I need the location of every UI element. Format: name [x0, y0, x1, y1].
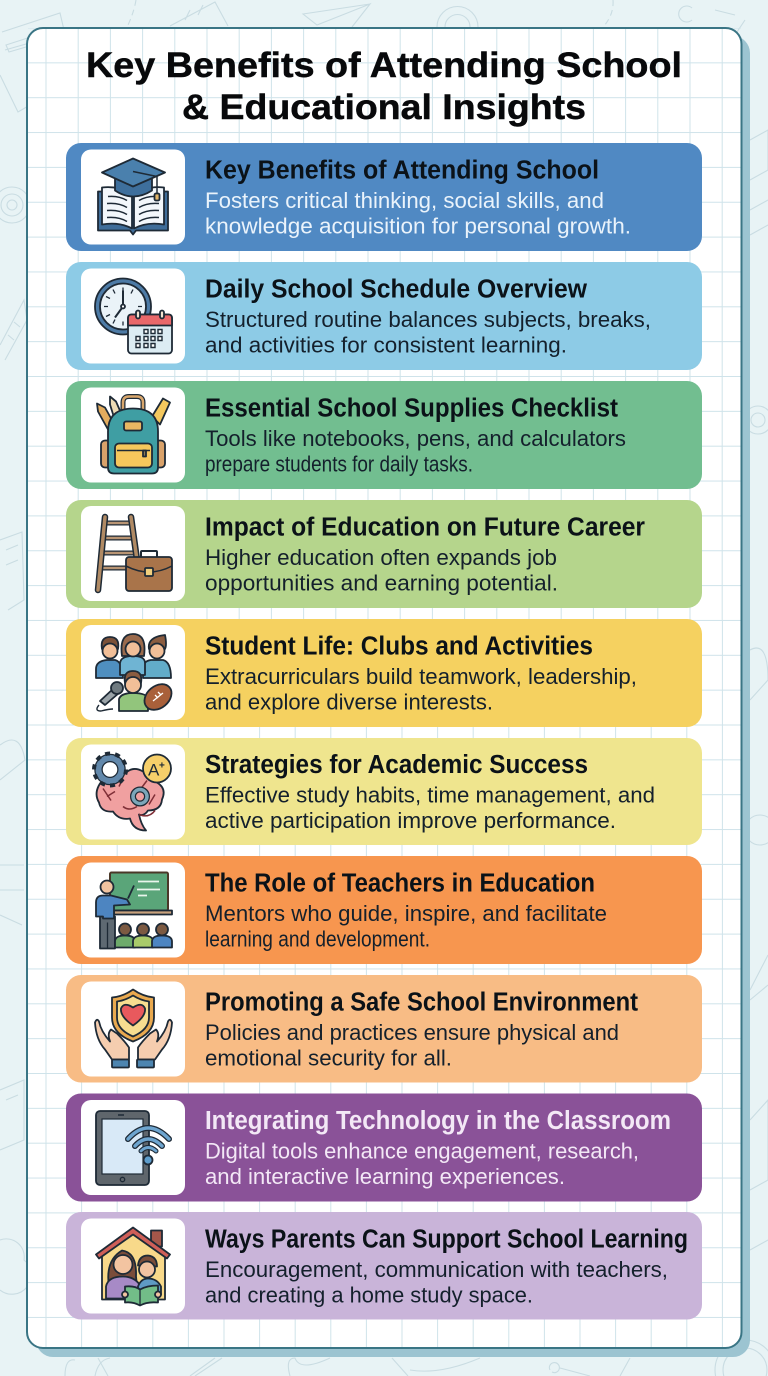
icon: brain, gears and A+ badge: [94, 754, 171, 830]
heading: Daily School Schedule Overview: [205, 276, 587, 304]
heading: The Role of Teachers in Education: [205, 870, 595, 898]
panel: technology in classroom: [66, 1094, 702, 1202]
description: Effective study habits, time management, and: [205, 782, 655, 808]
icon: brain, gears and A+ badge: +: [159, 760, 165, 772]
panel: academic success: [66, 738, 702, 845]
description: [205, 664, 637, 714]
description: Encouragement, communication with teachers,: [205, 1257, 668, 1282]
icon: backpack with pencils and ruler: [97, 396, 170, 474]
description: and activities for consistent learning.: [205, 332, 567, 358]
description: Policies and practices ensure physical and: [205, 1020, 619, 1045]
heading: Student Life: Clubs and Activities: [205, 632, 593, 660]
heading: Ways Parents Can Support School Learning: [205, 1226, 688, 1254]
heading: Promoting a Safe School Environment: [205, 988, 638, 1016]
icon: parent and child reading in house: [96, 1228, 170, 1306]
description: [205, 901, 607, 952]
description: [205, 1138, 639, 1189]
panel: future career: [66, 500, 702, 608]
description: [205, 188, 631, 238]
description: learning and development.: [205, 926, 430, 952]
panel: student life: [66, 619, 702, 727]
description: Structured routine balances subjects, breaks,: [205, 307, 651, 332]
description: Fosters critical thinking, social skills, and: [205, 188, 604, 213]
heading: Essential School Supplies Checklist: [205, 394, 618, 422]
icon: ladder and briefcase: [98, 517, 172, 591]
description: Digital tools enhance engagement, research,: [205, 1138, 639, 1164]
description: Tools like notebooks, pens, and calculators: [205, 426, 626, 451]
heading: Impact of Education on Future Career: [205, 514, 645, 542]
heading: Key Benefits of Attending School: [205, 156, 599, 184]
icon: tablet with wifi signal: [96, 1111, 169, 1185]
description: knowledge acquisition for personal growth.: [205, 214, 631, 238]
panel: daily schedule: [66, 262, 702, 370]
panel: school supplies: [66, 381, 702, 489]
icon: shield with heart held by hands: [95, 990, 172, 1068]
panel: safe environment: [66, 975, 702, 1082]
description: and interactive learning experiences.: [205, 1164, 565, 1189]
description: prepare students for daily tasks.: [205, 452, 473, 476]
title: & Educational Insights: [182, 88, 586, 127]
heading: Integrating Technology in the Classroom: [205, 1107, 671, 1135]
description: [205, 307, 651, 358]
description: active participation improve performance.: [205, 808, 616, 833]
title: Key Benefits of Attending School: [86, 46, 682, 85]
icon: clock and calendar: [95, 278, 172, 354]
icon: teacher at chalkboard with students: [96, 872, 172, 948]
icon: graduation cap on open book: [98, 158, 168, 234]
description: and explore diverse interests.: [205, 690, 493, 714]
icon: students, microphone and football: [96, 634, 177, 715]
description: [205, 545, 558, 596]
heading: Strategies for Academic Success: [205, 751, 588, 779]
icon: brain, gears and A+ badge: A: [148, 760, 160, 780]
description: opportunities and earning potential.: [205, 570, 558, 596]
title: [86, 46, 682, 127]
description: Higher education often expands job: [205, 545, 557, 570]
description: [205, 782, 655, 833]
description: [205, 1020, 619, 1070]
description: [205, 426, 626, 476]
description: and creating a home study space.: [205, 1282, 533, 1308]
description: Extracurriculars build teamwork, leadership,: [205, 664, 637, 689]
description: Mentors who guide, inspire, and facilitate: [205, 901, 607, 926]
panel: key benefits: [66, 143, 702, 251]
panel: role of teachers: [66, 856, 702, 964]
description: emotional security for all.: [205, 1046, 452, 1070]
description: [205, 1257, 668, 1308]
panel: parents support: [66, 1212, 702, 1320]
